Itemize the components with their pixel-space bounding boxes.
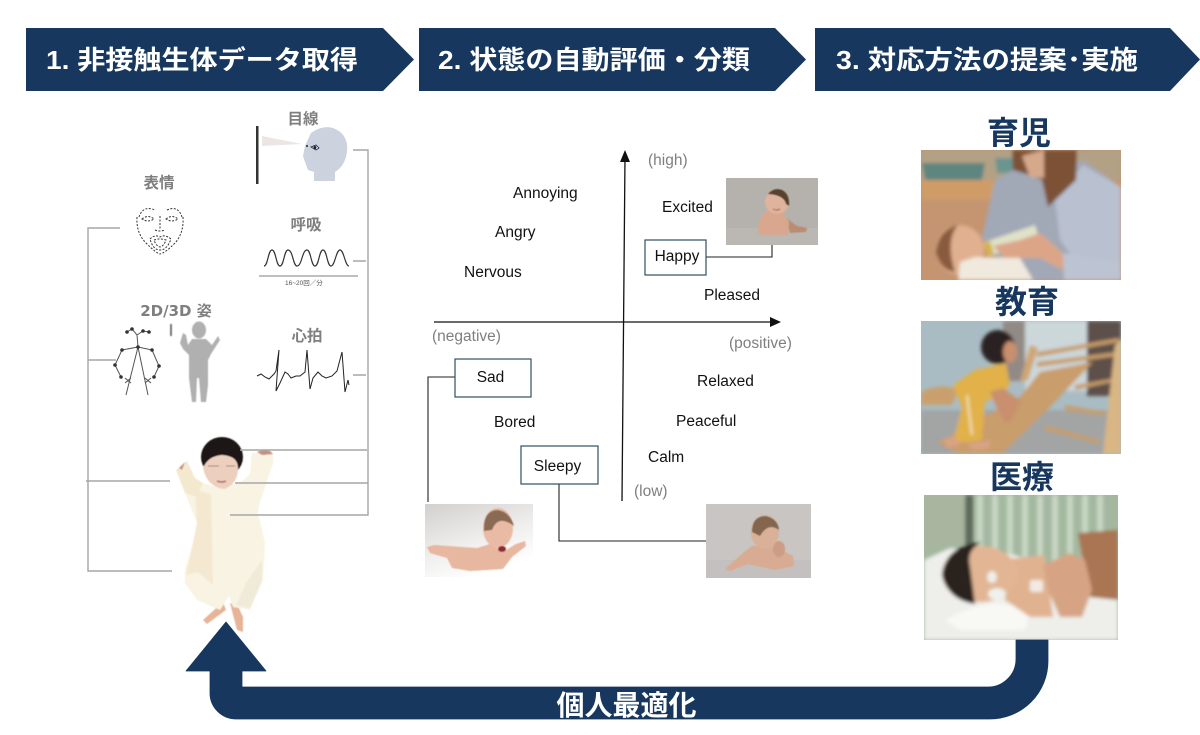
label: heart rate: 心拍: [291, 327, 323, 345]
connector lines: [428, 245, 772, 541]
axis labels: (high): [648, 152, 688, 169]
header: step 3: 3. 対応方法の提案･実施: [836, 45, 1138, 75]
label: gaze: 目線: [287, 109, 319, 128]
emotion words: [464, 185, 760, 466]
chart: respiration wave: 16~20回／分: [285, 278, 323, 287]
box: Happy: [645, 240, 706, 275]
box: Sleepy: [521, 446, 598, 484]
panel: contactless biometric data acquisition: [86, 109, 368, 632]
baby: hair: [201, 437, 243, 477]
icon: 3D body mesh: [170, 322, 220, 402]
header: step 1: [26, 28, 414, 91]
axis labels: [432, 152, 792, 500]
heading: medical: 医療: [990, 459, 1054, 495]
emotion words: Relaxed: [697, 373, 754, 390]
panel: emotion quadrant chart: [425, 150, 818, 578]
axis labels: (low): [634, 483, 668, 500]
header: step 2: [419, 28, 806, 91]
photo: sleepy baby: [706, 504, 811, 578]
header: step 1: 1. 非接触生体データ取得: [46, 45, 358, 75]
emotion words: Peaceful: [676, 413, 736, 430]
emotion words: Angry: [495, 224, 536, 241]
axis labels: (negative): [432, 328, 501, 345]
box: Happy: Happy: [655, 248, 700, 265]
icon: gaze head: [256, 126, 347, 184]
baby: feet: [203, 602, 243, 632]
emotion words: Pleased: [704, 287, 760, 304]
heading: childcare: 育児: [987, 115, 1051, 151]
label: respiration: 呼吸: [290, 216, 322, 234]
photo: mother feeding baby: [921, 150, 1121, 280]
chart: ECG: [257, 350, 349, 392]
box: Sad: [455, 359, 531, 397]
header: step 2: 2. 状態の自動評価・分類: [438, 45, 750, 75]
baby: romper: [176, 453, 273, 610]
header: step 3: [815, 28, 1200, 91]
baby: face: [203, 455, 238, 489]
emotion words: Excited: [662, 199, 713, 216]
axis labels: (positive): [729, 335, 792, 352]
label: facial expression: 表情: [143, 173, 175, 192]
photo: crying baby: [425, 504, 533, 577]
photo: happy baby: [726, 178, 818, 245]
heading: education: 教育: [995, 284, 1059, 320]
panel: response proposal and implementation: [921, 115, 1121, 640]
emotion words: Nervous: [464, 264, 522, 281]
arrow: personal optimization feedback loop: [186, 622, 1048, 721]
arrow label: 個人最適化: [556, 690, 697, 721]
emotion words: Calm: [648, 449, 684, 466]
label: 2D/3D pose: 2D/3D 姿: [140, 302, 212, 320]
photo: toddler climbing wooden ramp: [921, 321, 1121, 454]
emotion words: Annoying: [513, 185, 578, 202]
axis: arousal: [620, 150, 630, 501]
chart: respiration wave: [259, 250, 358, 287]
connector lines: left bracket: [86, 228, 172, 571]
icon: face landmarks: [137, 209, 183, 254]
box: Sad: Sad: [477, 369, 504, 386]
baby: hands: [179, 450, 273, 470]
connector lines: right bracket: [230, 150, 368, 515]
photo: newborn in incubator: [924, 495, 1118, 640]
axis: valence: [434, 317, 781, 327]
box: Sleepy: Sleepy: [534, 458, 581, 475]
emotion words: Bored: [494, 414, 535, 431]
icon: 2D skeleton: [113, 327, 161, 395]
baby: romper shading: [186, 490, 213, 585]
photo: sleeping baby in cream romper: [176, 437, 273, 632]
